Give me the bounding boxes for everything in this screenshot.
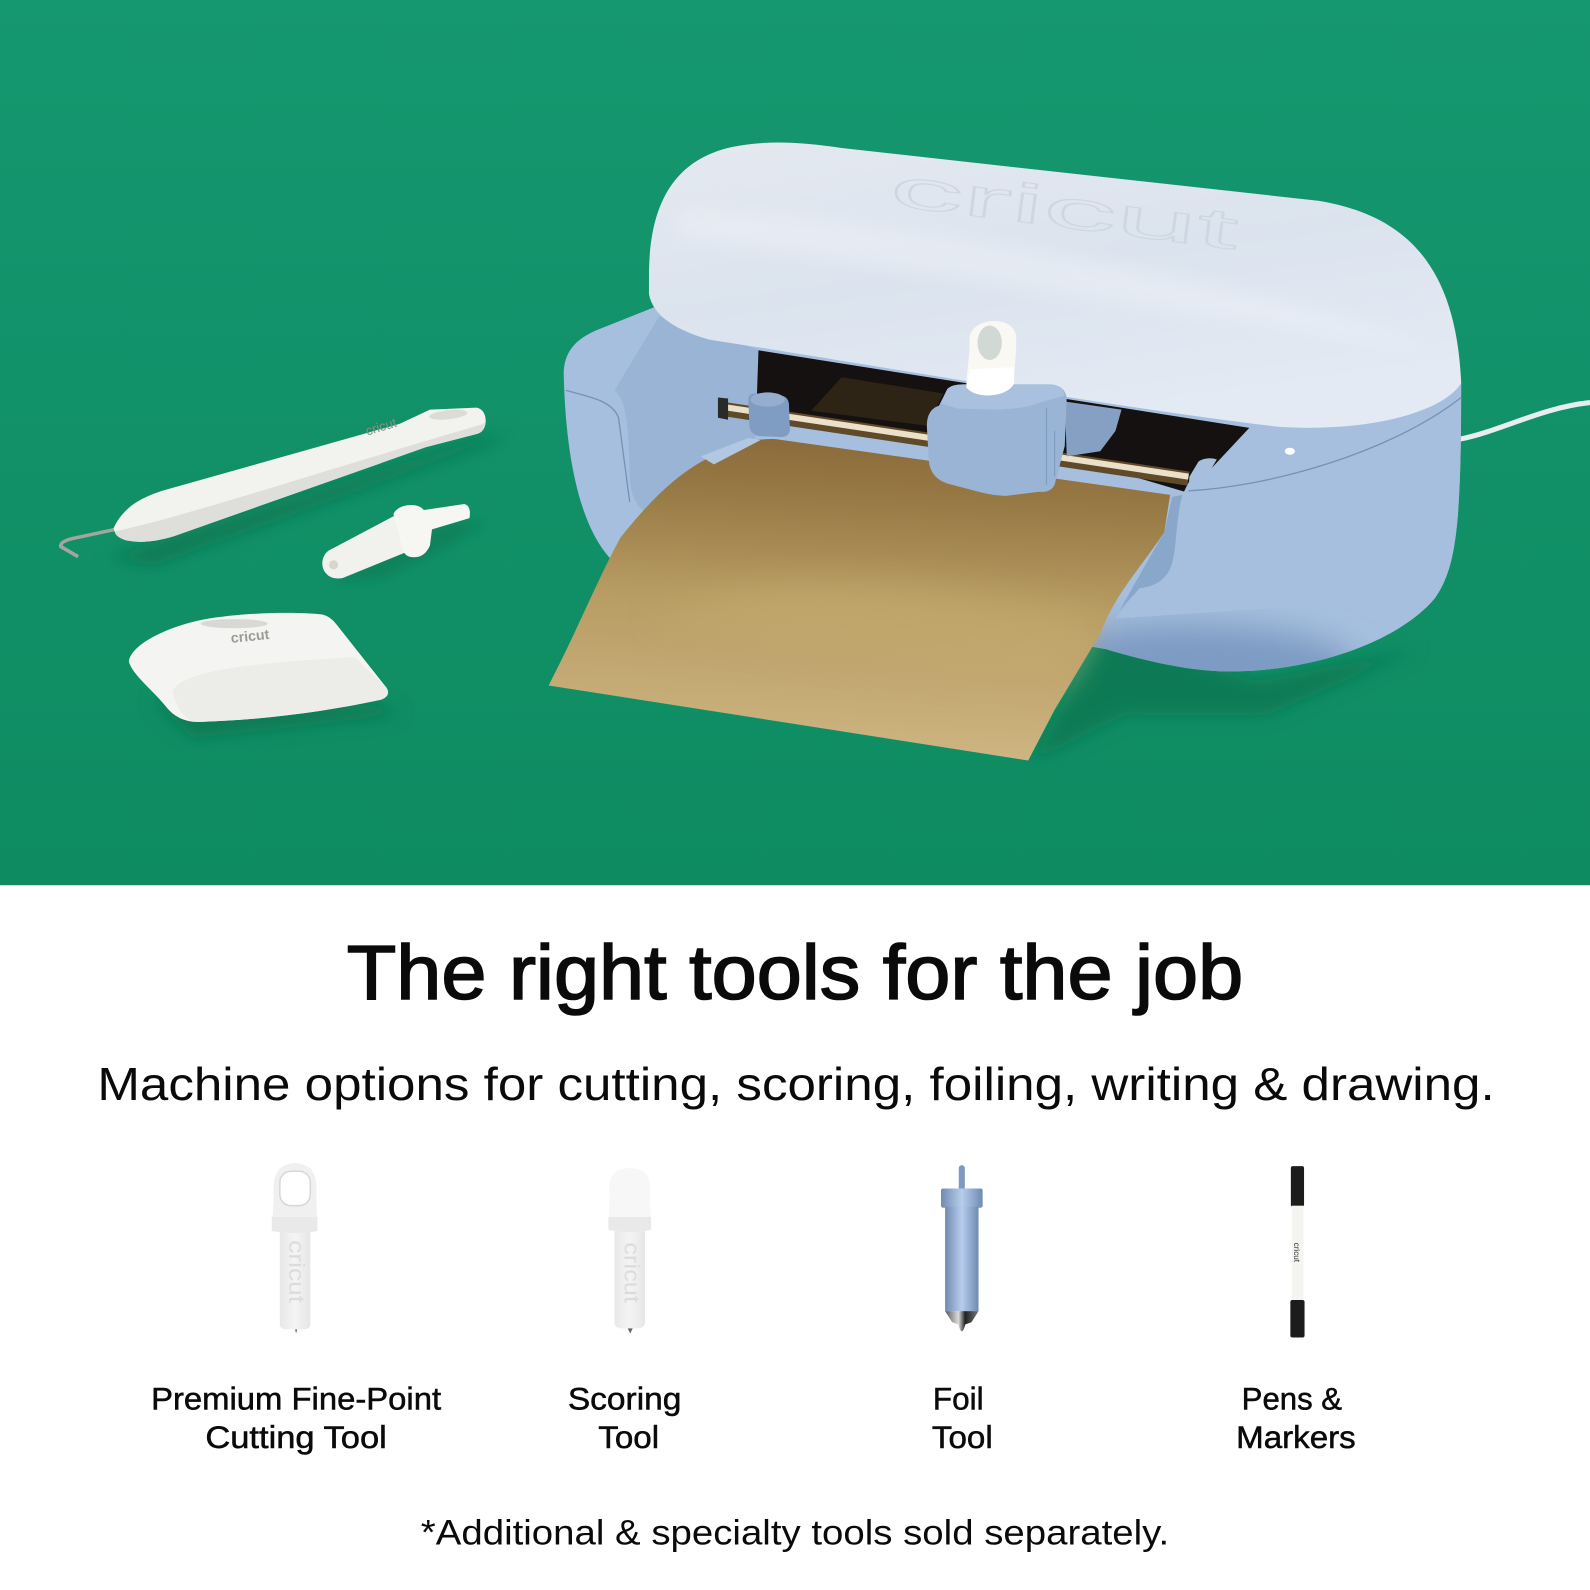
gold foil sheet xyxy=(549,439,1170,761)
label: Markers xyxy=(1236,1420,1356,1455)
weeding tool xyxy=(61,408,486,557)
right foil guide xyxy=(1188,458,1217,489)
tool: foil tool xyxy=(932,1165,993,1455)
icon: foil tool xyxy=(941,1165,983,1331)
right front block xyxy=(1116,430,1461,618)
label: Foil xyxy=(933,1382,984,1417)
icon: pen xyxy=(1290,1166,1305,1338)
label xyxy=(151,1382,441,1455)
label: Scoring xyxy=(568,1382,681,1417)
carriage rear plate xyxy=(1065,402,1122,456)
icon: scoring tool xyxy=(608,1168,651,1333)
tool: scoring tool xyxy=(568,1168,681,1455)
left inner wall xyxy=(615,316,758,515)
power cable xyxy=(1460,403,1590,439)
label: Tool xyxy=(598,1420,659,1455)
lid highlight xyxy=(679,208,1430,350)
label xyxy=(1236,1382,1356,1455)
footnote: *Additional & specialty tools sold separately. xyxy=(421,1512,1169,1552)
machine shadow xyxy=(1030,629,1420,763)
icon: pen: cricut xyxy=(1292,1243,1301,1263)
base lower shading xyxy=(1092,612,1356,672)
label: Pens & xyxy=(1242,1382,1342,1417)
inner dark opening xyxy=(745,350,1249,493)
foil glow xyxy=(649,584,1100,684)
back sheen behind rail xyxy=(811,377,943,426)
panel: green photo background xyxy=(0,0,1590,885)
squeegee scraper xyxy=(129,613,401,738)
icon: cutting tool: cricut xyxy=(284,1240,309,1304)
left foil guide xyxy=(701,438,761,464)
label xyxy=(932,1382,993,1455)
tool: pens and markers xyxy=(1236,1166,1356,1455)
accessory shadows xyxy=(106,436,512,566)
rail rod xyxy=(718,398,1188,479)
icon: scoring tool: cricut xyxy=(620,1242,645,1304)
machine base xyxy=(564,307,1461,672)
right front dent xyxy=(1119,495,1182,610)
tool: premium fine-point cutting tool xyxy=(151,1163,441,1455)
photo: cutting machine with gold foil xyxy=(549,143,1590,763)
lid xyxy=(649,143,1461,428)
weeding tool: cricut xyxy=(364,415,399,438)
squeegee scraper: cricut xyxy=(230,627,270,647)
title: The right tools for the job xyxy=(347,930,1243,1016)
label: Tool xyxy=(932,1420,993,1455)
icon: cutting tool xyxy=(272,1163,317,1333)
label: Premium Fine-Point xyxy=(151,1382,441,1417)
blade tool xyxy=(322,504,487,583)
tool handle xyxy=(966,321,1016,395)
embossed logo: cricut xyxy=(887,155,1242,261)
photo: loose accessories xyxy=(61,408,512,738)
roller knob xyxy=(748,392,790,437)
subtitle: Machine options for cutting, scoring, foiling, writing & drawing. xyxy=(97,1058,1495,1110)
status light xyxy=(1285,448,1295,455)
label xyxy=(568,1382,681,1455)
carriage xyxy=(927,384,1067,496)
seam lines xyxy=(566,390,1461,502)
label: Cutting Tool xyxy=(205,1420,387,1455)
